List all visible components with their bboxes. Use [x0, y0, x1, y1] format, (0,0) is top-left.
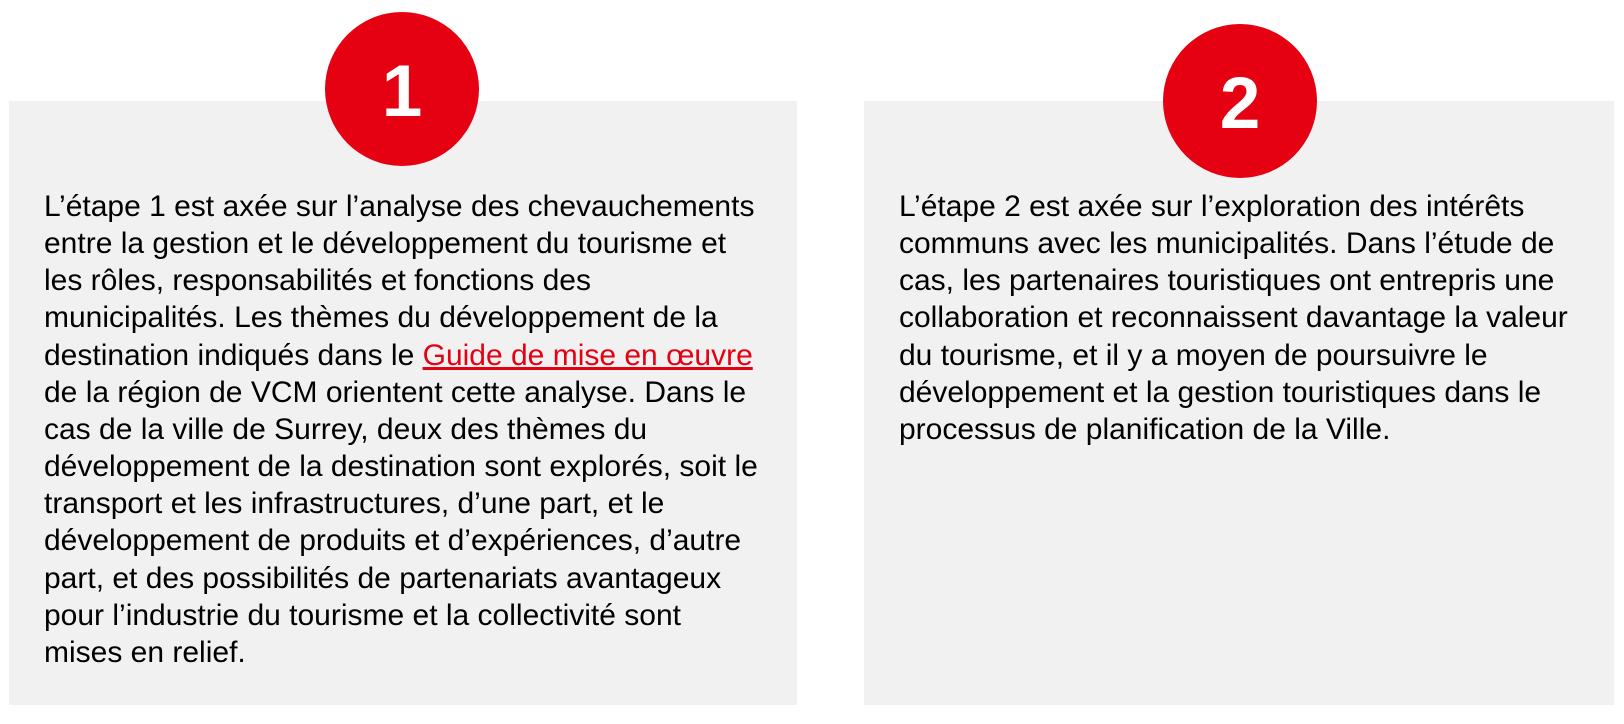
panel: step 1: [9, 101, 797, 705]
text block: step 1 description: destination indiqués dans le Guide de mise en œuvre: [44, 339, 753, 372]
text block: step 1 description: [44, 190, 758, 669]
text block: step 2 description: L’étape 2 est axée sur l’exploration des intérêts: [899, 190, 1524, 223]
text block: step 1 description: municipalités. Les thèmes du développement de la: [44, 301, 718, 334]
text block: step 1 description: mises en relief.: [44, 636, 246, 669]
text block: step 2 description: processus de planification de la Ville.: [899, 413, 1390, 446]
text block: step 2 description: cas, les partenaires touristiques ont entrepris une: [899, 264, 1554, 297]
badge: number 1: [325, 12, 479, 166]
text block: step 2 description: collaboration et reconnaissent davantage la valeur: [899, 301, 1568, 334]
text block: step 1 description: entre la gestion et le développement du tourisme et: [44, 227, 726, 260]
text block: step 1 description: développement de la destination sont explorés, soit le: [44, 450, 758, 483]
text block: step 1 description: transport et les infrastructures, d’une part, et le: [44, 487, 664, 520]
text block: step 1 description: pour l’industrie du tourisme et la collectivité sont: [44, 599, 681, 632]
text block: step 1 description: part, et des possibilités de partenariats avantageux: [44, 562, 721, 595]
text block: step 1 description: développement de produits et d’expériences, d’autre: [44, 524, 741, 557]
text block: step 2 description: communs avec les municipalités. Dans l’étude de: [899, 227, 1554, 260]
badge: number 2: [1163, 24, 1317, 178]
text block: step 1 description: les rôles, responsabilités et fonctions des: [44, 264, 591, 297]
text block: step 2 description: [899, 190, 1568, 446]
text block: step 2 description: du tourisme, et il y a moyen de poursuivre le: [899, 339, 1488, 372]
text block: step 1 description: de la région de VCM orientent cette analyse. Dans le: [44, 376, 746, 409]
text block: step 1 description: cas de la ville de Surrey, deux des thèmes du: [44, 413, 647, 446]
panel: step 2: [864, 101, 1614, 705]
badge: number 1: 1: [382, 51, 422, 132]
text block: step 2 description: développement et la gestion touristiques dans le: [899, 376, 1541, 409]
text block: step 1 description: L’étape 1 est axée sur l’analyse des chevauchements: [44, 190, 754, 223]
badge: number 2: 2: [1220, 63, 1260, 144]
